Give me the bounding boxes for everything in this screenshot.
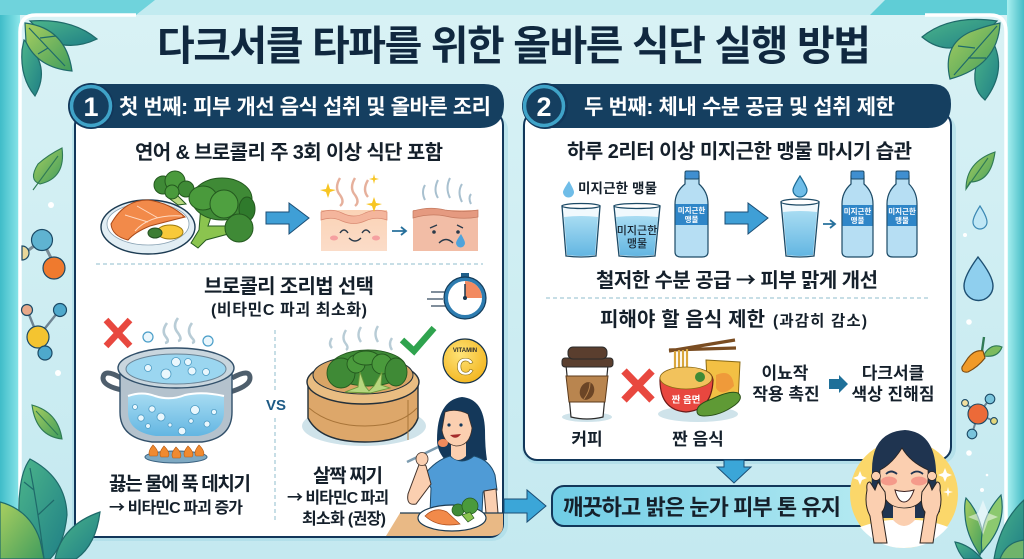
divider: vertical	[274, 330, 276, 522]
caption: steam result: → 비타민C 파괴	[287, 484, 389, 508]
caption: steam: 살짝 찌기	[313, 465, 383, 487]
icon: glass three	[781, 199, 819, 257]
icon: small leaf	[33, 148, 63, 190]
label: coffee: 커피	[571, 430, 603, 449]
arrow: salmon to skin	[266, 203, 309, 234]
icon: salmon plate	[101, 200, 195, 254]
icon: small leaf right	[966, 152, 995, 189]
arrow: diuretic to dark circles	[829, 375, 848, 393]
icon: bottle three	[887, 171, 917, 257]
icon: bottle three: 맹물	[895, 215, 909, 225]
icon: vitamin c	[443, 339, 487, 383]
heading bar: second method	[522, 83, 951, 129]
icon: green check	[402, 328, 434, 351]
subheading: foods to avoid: 피해야 할 음식 제한	[600, 308, 765, 331]
result banner: 깨끗하고 밝은 눈가 피부 톤 유지	[563, 495, 841, 520]
icon: large drop	[964, 257, 993, 300]
icon: bottom-right plant	[955, 495, 1024, 559]
heading bar: first method: 1	[83, 92, 99, 122]
caption: boiling: 끓는 물에 푹 데치기	[109, 473, 251, 495]
dot	[48, 202, 54, 208]
icon: small drop	[973, 206, 987, 229]
icon: stopwatch	[427, 273, 486, 319]
icon: bottle one: 맹물	[685, 214, 698, 224]
label: salty food: 짠 음식	[672, 430, 724, 449]
dot	[963, 233, 967, 237]
icon: bottle one: 미지근한	[678, 205, 705, 215]
result banner	[552, 486, 882, 526]
icon: top drop	[793, 176, 807, 197]
icon: sad skin	[413, 178, 478, 251]
dot	[55, 370, 61, 376]
text: colour deepens: 색상 진해짐	[852, 385, 934, 404]
heading bar: second method: 2	[536, 92, 552, 122]
label: lukewarm water: 미지근한 맹물	[578, 181, 657, 196]
dots	[966, 450, 988, 492]
text: dark circles: 다크서클	[862, 364, 924, 383]
icon: bottle two	[842, 171, 873, 257]
caption: minimise vitamin loss: (비타민C 파괴 최소화)	[211, 301, 367, 319]
icon: carrot	[962, 337, 1002, 372]
arrow: first panel to result	[504, 490, 546, 522]
divider	[546, 297, 928, 299]
icon: water drop label	[563, 181, 574, 198]
left decoration column	[19, 21, 97, 559]
right decoration column	[922, 19, 1024, 559]
arrow: small skin	[392, 227, 406, 235]
label: vs: VS	[266, 397, 286, 414]
icon: woman eating	[407, 397, 498, 513]
icon: glass two: 맹물	[627, 237, 647, 250]
icon: noodles and snacks: 짠 음면	[672, 394, 700, 406]
panel: second method	[522, 83, 956, 464]
icon: molecule lower	[22, 304, 66, 360]
title: 다크서클 타파를 위한 올바른 식단 실행 방법	[157, 23, 871, 69]
icon: large broccoli	[189, 178, 255, 248]
icon: steam and bubbles	[143, 318, 213, 346]
icon: top-right leaves	[922, 19, 1000, 100]
icon: bamboo steamer	[302, 350, 426, 446]
icon: bottle two: 맹물	[851, 215, 864, 225]
icon: smiling woman	[850, 430, 958, 548]
icon: boiling pot	[103, 348, 250, 463]
text: diuretic action: 작용 촉진	[752, 385, 820, 404]
panel: first method	[68, 83, 508, 541]
arrow: second panel to result	[717, 460, 751, 483]
icon: bottle two: 미지근한	[844, 206, 871, 216]
icon: bottom-left leaves back	[19, 459, 67, 559]
icon: glass one	[562, 204, 600, 257]
heading bar: first method	[68, 83, 504, 129]
icon: steam right	[330, 326, 392, 350]
icon: molecule upper	[22, 230, 65, 279]
icon: noodles and snacks	[658, 340, 740, 422]
text: diuretic: 이뇨작	[762, 364, 809, 383]
text: hydration result: 철저한 수분 공급 → 피부 맑게 개선	[596, 264, 878, 293]
heading bar: second method: 두 번째: 체내 수분 공급 및 섭취 제한	[584, 96, 895, 119]
subheading: drink water: 하루 2리터 이상 미지근한 맹물 마시기 습관	[567, 140, 912, 163]
arrow: water to skin	[725, 203, 768, 234]
dot	[966, 319, 972, 325]
icon: red cross	[624, 371, 652, 400]
icon: lower leaf	[32, 405, 62, 439]
subheading: salmon and broccoli: 연어 & 브로콜리 주 3회 이상 식단 포함	[135, 141, 443, 164]
icon: vitamin c: VITAMIN	[453, 348, 477, 354]
icon: bottom-left leaves front	[0, 502, 100, 559]
arrow: small glass to bottles	[823, 220, 835, 228]
icon: small broccoli	[154, 171, 194, 205]
icon: coffee cup	[562, 347, 613, 422]
icon: glass two: 미지근한	[617, 224, 657, 237]
icon: molecule right	[962, 394, 997, 439]
divider	[96, 263, 483, 265]
icon: glass two	[614, 204, 660, 257]
caption: recommended: 최소화 (권장)	[302, 510, 386, 528]
subheading: cooking method: 브로콜리 조리법 선택	[204, 275, 374, 298]
heading bar: first method: 첫 번째: 피부 개선 음식 섭취 및 올바른 조리	[119, 96, 491, 119]
icon: happy skin	[320, 174, 387, 251]
caption: reduce: (과감히 감소)	[773, 312, 867, 330]
icon: bottle one	[675, 171, 708, 257]
caption: boiling result: → 비타민C 파괴 증가	[109, 494, 243, 518]
icon: table with plate	[386, 498, 503, 536]
icon: bottle three: 미지근한	[888, 206, 916, 216]
icon: vitamin c: C	[456, 354, 474, 381]
icon: red cross	[106, 320, 130, 346]
icon: top-left leaves	[22, 21, 97, 96]
